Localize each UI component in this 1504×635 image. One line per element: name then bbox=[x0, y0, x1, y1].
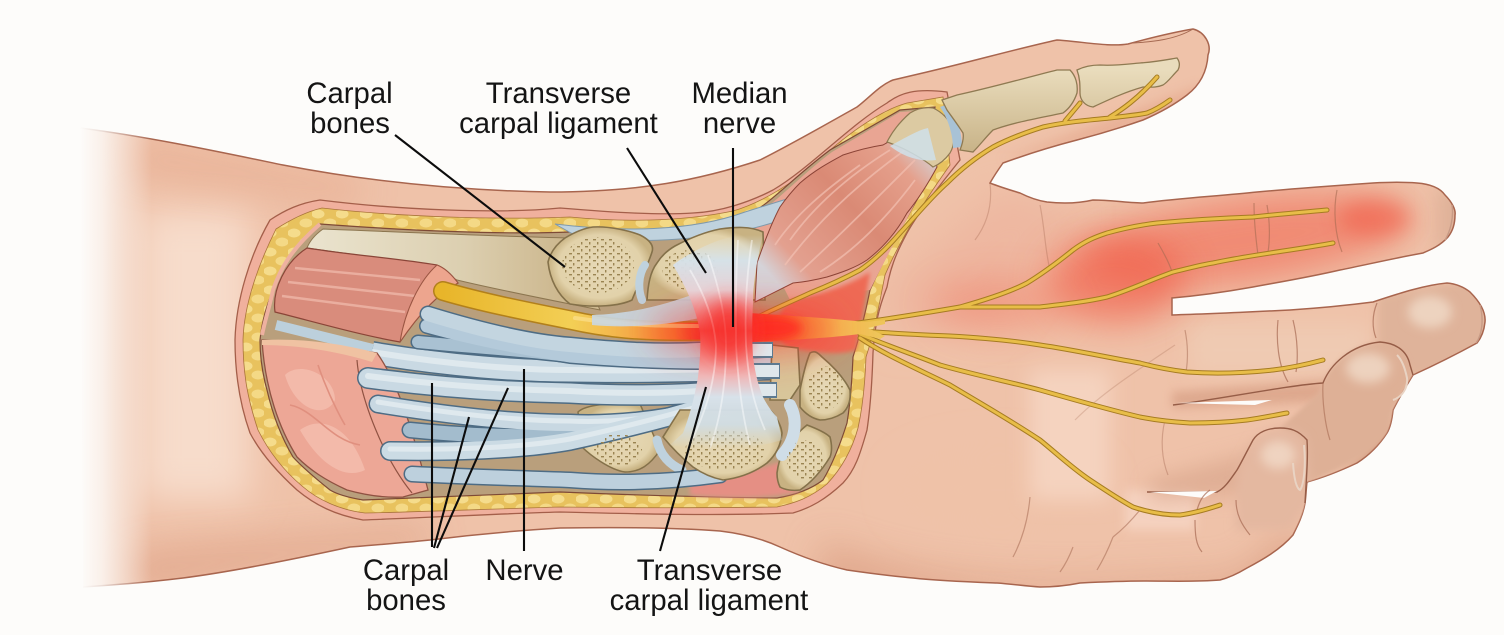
pink fascia along thumb bbox=[745, 110, 932, 300]
outer skin band of cutaway bbox=[235, 91, 960, 520]
thumb tendon fan bbox=[890, 128, 936, 160]
blue tendon bends bbox=[639, 265, 682, 470]
flexor tendons behind muscle cap bbox=[372, 352, 780, 371]
fat layer bbox=[243, 97, 950, 513]
label: median nerve: nerve bbox=[703, 107, 776, 140]
lower forearm muscle bbox=[262, 340, 428, 497]
label: carpal bones (top): bones bbox=[310, 107, 390, 140]
upper forearm muscle bbox=[275, 248, 458, 342]
label: transverse carpal ligament (top): Transverse bbox=[486, 77, 631, 110]
tendon sheet behind lower muscle bbox=[276, 325, 385, 352]
label: carpal bones (top): Carpal bbox=[306, 77, 393, 110]
ring and little finger tips bbox=[1147, 342, 1413, 530]
tendon fascicle over nerve bbox=[592, 292, 700, 326]
label: transverse carpal ligament (bottom): carpal ligament bbox=[610, 584, 808, 617]
lower central carpal bone bbox=[663, 410, 782, 480]
median nerve bbox=[443, 291, 700, 331]
bone speckle texture bbox=[562, 237, 843, 480]
transverse carpal ligament bbox=[670, 233, 782, 449]
label: transverse carpal ligament (top): carpal ligament bbox=[459, 107, 658, 140]
median nerve branches to fingers bbox=[760, 77, 1333, 515]
nerve trunk past ligament bbox=[750, 313, 885, 342]
pale tendon bend between bones bbox=[782, 405, 795, 455]
forearm bone (radius) bbox=[307, 229, 600, 310]
red palm tissue bbox=[777, 272, 870, 353]
label: transverse carpal ligament (bottom): Transverse bbox=[637, 554, 782, 587]
flexor tendons bbox=[368, 314, 720, 482]
label: nerve: Nerve bbox=[485, 554, 564, 587]
pale lining of left edge bbox=[262, 224, 320, 335]
thumb metacarpal head bbox=[887, 108, 954, 167]
forearm fade to background bbox=[60, 110, 155, 600]
lower left carpal bone bbox=[578, 403, 660, 472]
dissected cutaway window bbox=[235, 91, 960, 520]
thumb muscle bbox=[755, 127, 937, 302]
upper carpal bones bbox=[548, 227, 765, 306]
thumb phalanges bbox=[942, 58, 1179, 152]
inflammation glow at compression bbox=[650, 306, 840, 354]
red inflammation glow on fingers and palm bbox=[930, 175, 1414, 333]
blue fascia strip bbox=[555, 198, 790, 241]
fingernails and creases bbox=[975, 29, 1482, 572]
right carpal bones bbox=[770, 345, 850, 490]
label: carpal bones (bottom): bones bbox=[366, 584, 446, 617]
deep tissue bed bbox=[260, 107, 935, 500]
thumb joint cartilage bbox=[940, 104, 962, 148]
label: carpal bones (bottom): Carpal bbox=[363, 554, 449, 587]
label: median nerve: Median bbox=[691, 77, 788, 110]
gaps between fingers bbox=[1150, 400, 1272, 498]
pink lower tissue bbox=[690, 462, 800, 498]
leader lines bbox=[395, 135, 733, 551]
tendon stubs right of ligament bbox=[745, 350, 780, 390]
